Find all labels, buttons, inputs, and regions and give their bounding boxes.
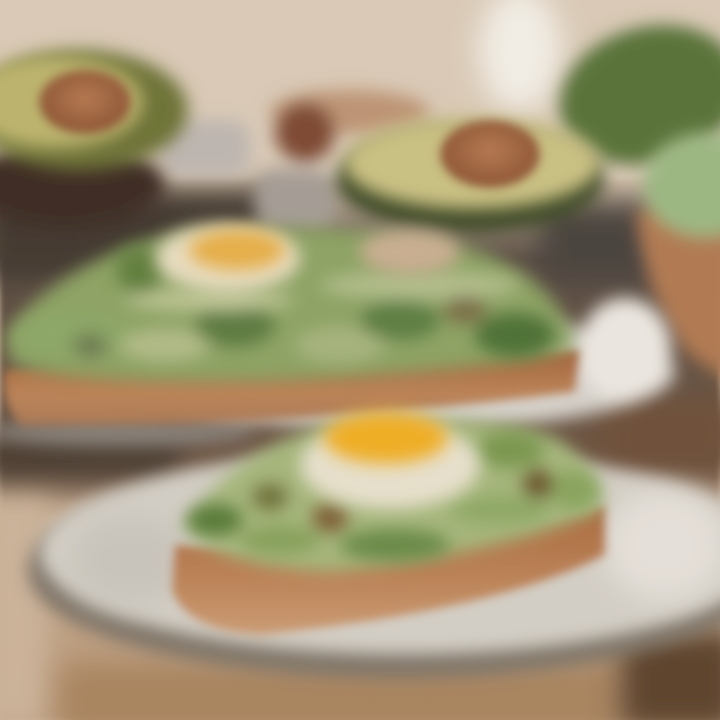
rear crust (4, 348, 580, 425)
object: glassware behind toast (160, 90, 430, 230)
avocado half: top left (0, 50, 188, 227)
plate: rear plate (0, 298, 675, 446)
front avocado spread (182, 418, 602, 572)
toast: front slice (172, 412, 605, 635)
vase: white vessel top right (478, 0, 562, 112)
avocado half: centre right (336, 117, 604, 232)
plate: front plate (28, 450, 720, 678)
bowl: terracotta with green filling, right (636, 133, 720, 385)
front crust (172, 505, 605, 635)
avocado: whole green, top right (544, 6, 720, 184)
rear egg (156, 224, 300, 292)
rear avocado spread (5, 228, 575, 382)
dark bowl under left avocado (0, 143, 165, 227)
front egg (300, 421, 480, 509)
toast: rear slice (4, 224, 580, 425)
